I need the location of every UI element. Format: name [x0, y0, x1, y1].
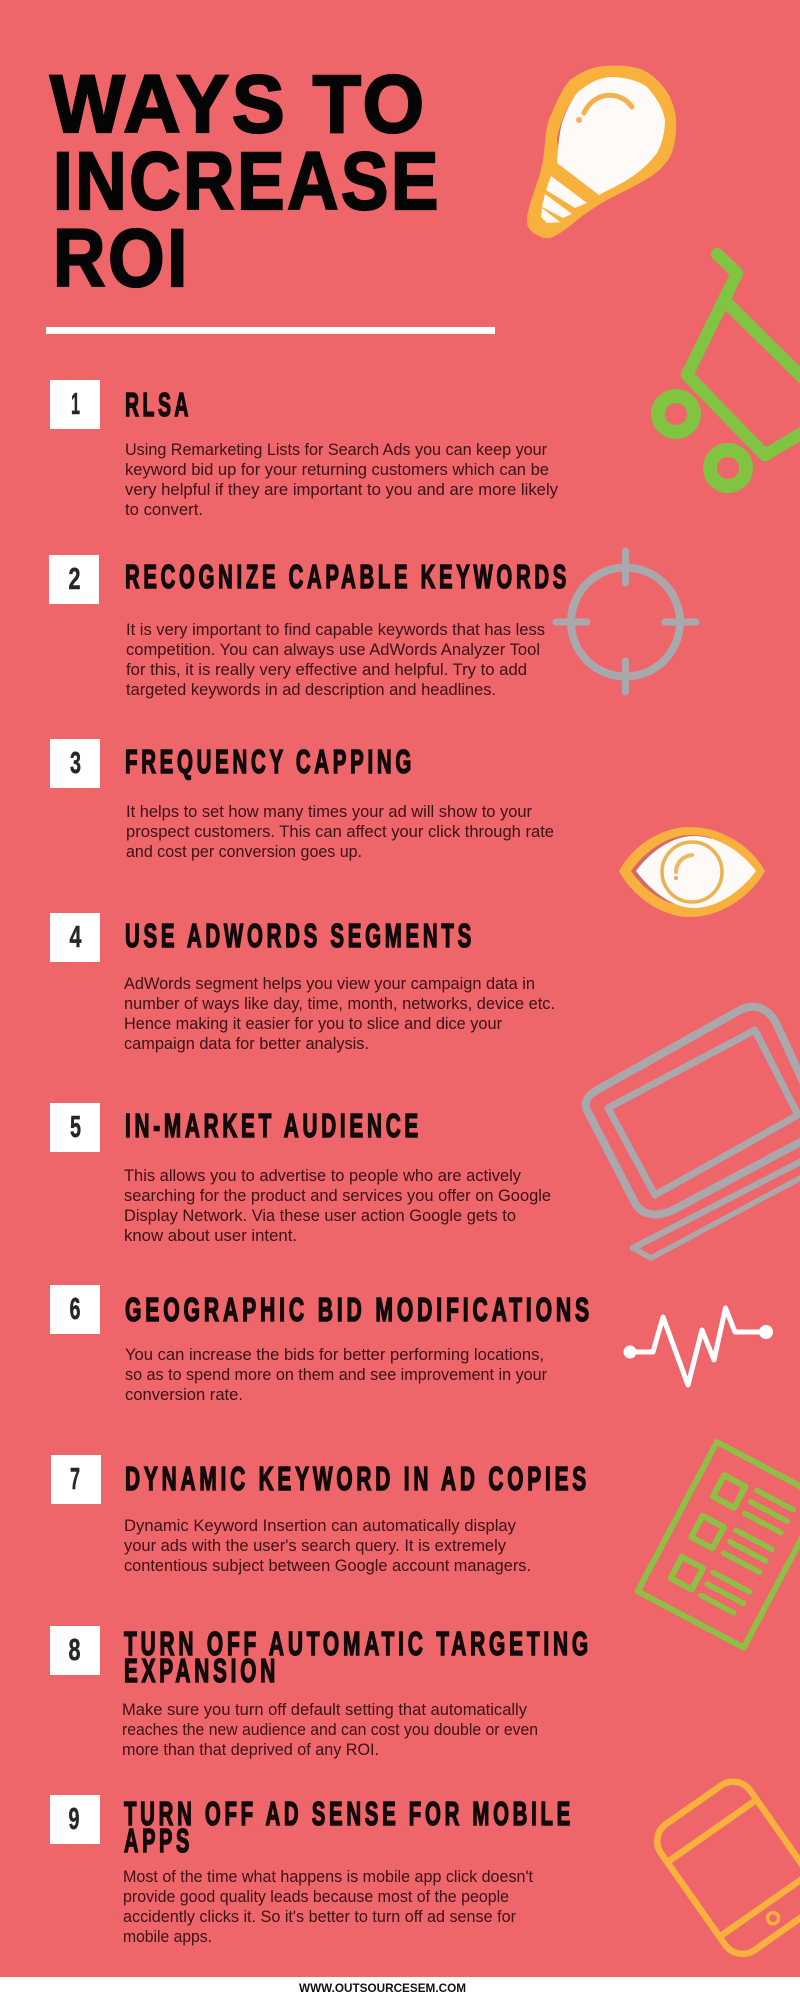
- icon: shopping cart: [658, 254, 800, 486]
- body 4: Hence making it easier for you to slice and dice your: [124, 1015, 503, 1033]
- body 5: Display Network. Via these user action Google gets to: [124, 1207, 516, 1225]
- body 5: This allows you to advertise to people who are actively: [124, 1167, 522, 1185]
- body 6: conversion rate.: [125, 1386, 243, 1404]
- heading 9: [124, 1795, 574, 1859]
- body 8: reaches the new audience and can cost you double or even: [122, 1721, 538, 1739]
- footer strip: [0, 1977, 800, 2000]
- title underline: [46, 327, 495, 334]
- body 2: for this, it is really very effective and helpful. Try to add: [126, 661, 527, 679]
- heading 1: RLSA: [125, 386, 192, 423]
- body 1: [125, 441, 559, 519]
- step 3: [50, 739, 554, 861]
- step 2: [49, 555, 570, 699]
- body 8: Make sure you turn off default setting that automatically: [122, 1701, 528, 1719]
- body 5: [124, 1167, 551, 1245]
- body 3: and cost per conversion goes up.: [126, 843, 362, 861]
- body 5: searching for the product and services you offer on Google: [124, 1187, 551, 1205]
- body 6: You can increase the bids for better performing locations,: [125, 1346, 544, 1364]
- step 6: [50, 1285, 593, 1404]
- body 4: campaign data for better analysis.: [124, 1035, 369, 1053]
- body 7: [124, 1517, 531, 1575]
- body 2: competition. You can always use AdWords Analyzer Tool: [126, 641, 540, 659]
- number box 5: 5: [70, 1109, 81, 1144]
- footer url: WWW.OUTSOURCESEM.COM: [299, 1983, 466, 1995]
- body 3: prospect customers. This can affect your click through rate: [126, 823, 554, 841]
- body 3: [126, 803, 554, 861]
- number box 4: [50, 913, 100, 962]
- title: [50, 59, 441, 304]
- body 9: Most of the time what happens is mobile app click doesn't: [123, 1868, 533, 1886]
- number box 7: [51, 1455, 101, 1504]
- step 7: [51, 1455, 590, 1575]
- number box 9: 9: [68, 1801, 80, 1836]
- body 4: number of ways like day, time, month, networks, device etc.: [124, 995, 555, 1013]
- body 7: your ads with the user's search query. It is extremely: [124, 1537, 507, 1555]
- icon: laptop: [586, 1007, 800, 1258]
- icon: light bulb: [527, 66, 676, 238]
- body 1: to convert.: [125, 501, 203, 519]
- body 9: accidently clicks it. So it's better to turn off ad sense for: [123, 1908, 517, 1926]
- number box 3: 3: [70, 745, 81, 780]
- body 9: [123, 1868, 533, 1946]
- number box 3: [50, 739, 100, 788]
- body 1: very helpful if they are important to you and are more likely: [125, 481, 559, 499]
- number box 5: [50, 1103, 100, 1152]
- number box 2: 2: [68, 561, 80, 596]
- step 9: [50, 1795, 574, 1946]
- number box 8: [50, 1626, 100, 1675]
- body 3: It helps to set how many times your ad will show to your: [126, 803, 533, 821]
- icon: crosshair target: [556, 551, 696, 692]
- body 1: Using Remarketing Lists for Search Ads you can keep your: [125, 441, 548, 459]
- body 6: [125, 1346, 548, 1404]
- body 7: Dynamic Keyword Insertion can automatically display: [124, 1517, 517, 1535]
- step 8: [50, 1625, 592, 1759]
- heading 3: FREQUENCY CAPPING: [125, 743, 415, 780]
- icon: document checklist: [638, 1442, 800, 1648]
- number box 2: [49, 555, 99, 604]
- heading 4: USE ADWORDS SEGMENTS: [125, 917, 475, 954]
- body 9: mobile apps.: [123, 1928, 212, 1946]
- body 9: provide good quality leads because most of the people: [123, 1888, 509, 1906]
- number box 9: [50, 1795, 100, 1844]
- body 4: AdWords segment helps you view your campaign data in: [124, 975, 535, 993]
- number box 8: 8: [68, 1632, 80, 1667]
- body 2: It is very important to find capable keywords that has less: [126, 621, 545, 639]
- number box 7: 7: [70, 1461, 80, 1496]
- step 1: [50, 380, 559, 519]
- title: ROI: [53, 213, 190, 304]
- body 2: [126, 621, 545, 699]
- number box 1: [50, 380, 100, 429]
- body 6: so as to spend more on them and see improvement in your: [125, 1366, 548, 1384]
- body 5: know about user intent.: [124, 1227, 297, 1245]
- heading 8: [124, 1625, 592, 1689]
- number box 1: 1: [71, 386, 80, 421]
- icon: pulse line: [624, 1308, 773, 1385]
- body 1: keyword bid up for your returning customers which can be: [125, 461, 549, 479]
- body 2: targeted keywords in ad description and headlines.: [126, 681, 496, 699]
- title: WAYS TO: [50, 59, 427, 150]
- number box 6: 6: [70, 1291, 80, 1326]
- step 5: [50, 1103, 551, 1245]
- heading 9: APPS: [124, 1822, 193, 1859]
- body 8: [122, 1701, 538, 1759]
- icon: eye: [619, 827, 765, 917]
- heading 8: EXPANSION: [124, 1652, 279, 1689]
- number box 4: 4: [70, 919, 82, 954]
- title: INCREASE: [53, 136, 441, 227]
- icon: mobile phone: [649, 1773, 800, 1962]
- step 4: [50, 913, 555, 1053]
- body 7: contentious subject between Google account managers.: [124, 1557, 531, 1575]
- body 4: [124, 975, 555, 1053]
- number box 6: [50, 1285, 100, 1334]
- body 8: more than that deprived of any ROI.: [122, 1741, 379, 1759]
- heading 5: IN-MARKET AUDIENCE: [125, 1107, 422, 1144]
